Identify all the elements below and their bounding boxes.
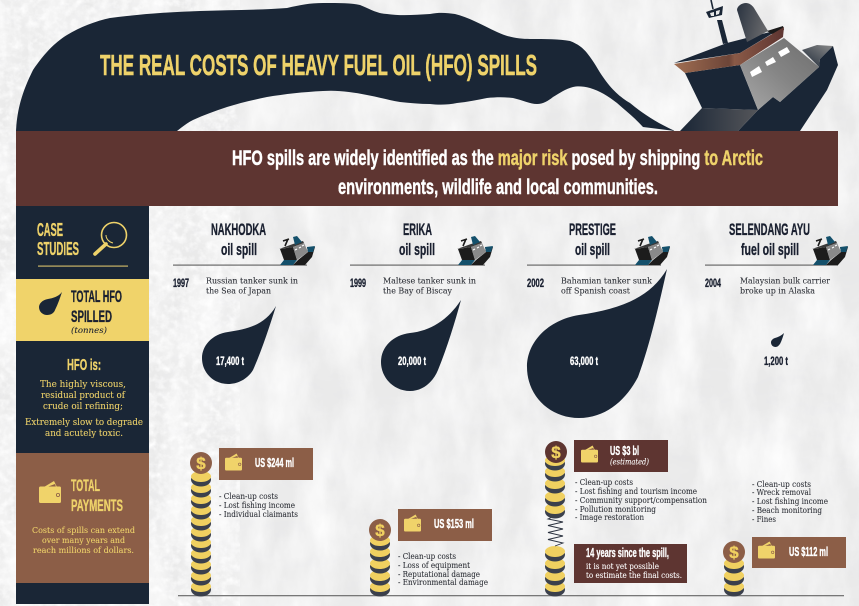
- panel: total payments: TOTAL: [71, 476, 100, 495]
- text: HFO definition: HFO is:: [67, 357, 101, 374]
- payment box: US $112 ml: [752, 537, 846, 568]
- case: Selendang Ayu header: fuel oil spill: [741, 241, 799, 259]
- drop: Nakhodka 17,400 t: 17,400 t: [216, 356, 244, 368]
- list: Erika costs: [398, 551, 488, 587]
- case: Erika header: ERIKA: [403, 221, 432, 239]
- panel: total HFO spilled: SPILLED: [71, 307, 112, 326]
- panel: total HFO spilled: TOTAL HFO: [71, 287, 122, 306]
- case: Nakhodka header: the Sea of Japan: [206, 286, 272, 296]
- case: Prestige header: off Spanish coast: [561, 286, 631, 296]
- case: Erika header: the Bay of Biscay: [383, 286, 452, 296]
- baseline for coin stacks: [178, 595, 844, 596]
- panel: total payments: [16, 453, 149, 583]
- callout: 14 years since the spill: it is not yet possible: [586, 561, 659, 571]
- icon: sinking ship: [674, 0, 838, 131]
- drop: Nakhodka 17,400 t: [202, 306, 276, 384]
- case: Nakhodka header: NAKHODKA: [211, 221, 266, 239]
- payment box: US $3 bl estimated: (estimated): [610, 458, 649, 466]
- case: Erika header: oil spill: [399, 241, 435, 259]
- banner: key message: [16, 131, 838, 206]
- list: Nakhodka costs: [219, 491, 298, 519]
- coin stack: US $112 ml: [723, 541, 745, 596]
- list: Erika costs: - Reputational damage: [398, 569, 480, 579]
- list: Prestige costs: [575, 477, 708, 522]
- banner: key message: HFO spills are widely identified as the major risk posed by shipping to Arctic: [232, 147, 763, 170]
- case: Erika header: [350, 221, 493, 296]
- oil slick band behind title: [16, 3, 675, 131]
- panel: total payments: PAYMENTS: [71, 496, 123, 515]
- banner: key message: environments, wildlife and local communities.: [338, 176, 658, 199]
- coin stack: US $112 ml: $: [729, 543, 739, 562]
- drop: Selendang Ayu 1,200 t: 1,200 t: [764, 356, 788, 368]
- payment box: US $112 ml: US $112 ml: [789, 545, 828, 559]
- callout: 14 years since the spill: to estimate the final costs.: [586, 570, 682, 580]
- icon: magnifying glass: [95, 222, 126, 254]
- list: Prestige costs: - Pollution monitoring: [575, 504, 657, 514]
- list: Nakhodka costs: - Clean-up costs: [219, 491, 278, 501]
- coin stack: US $244 ml: [190, 452, 212, 596]
- case: Erika header: 1999: [350, 276, 366, 290]
- callout: 14 years since the spill: 14 years since the spill,: [586, 546, 669, 560]
- case: Selendang Ayu header: 2004: [705, 276, 721, 290]
- coin stack: US $244 ml: $: [196, 454, 206, 473]
- text: HFO definition: and acutely toxic.: [45, 429, 123, 439]
- drop: Prestige 63,000 t: [527, 269, 667, 418]
- callout: 14 years since the spill: [574, 544, 687, 583]
- list: Erika costs: - Loss of equipment: [398, 560, 471, 570]
- list: Selendang Ayu costs: - Fines: [752, 514, 776, 524]
- list: Erika costs: - Clean-up costs: [398, 551, 456, 561]
- drop: Erika 20,000 t: 20,000 t: [398, 356, 426, 368]
- case: Nakhodka header: [173, 221, 315, 296]
- drop: Erika 20,000 t: [381, 300, 461, 391]
- case: Erika header: Maltese tanker sunk in: [383, 276, 477, 286]
- payment box: US $153 ml: US $153 ml: [434, 517, 474, 531]
- panel: total HFO spilled: [16, 279, 149, 341]
- list: Selendang Ayu costs: - Beach monitoring: [752, 505, 823, 515]
- payment box: US $3 bl estimated: [574, 440, 668, 472]
- case: Selendang Ayu header: Malaysian bulk carrier: [740, 276, 830, 286]
- case: Prestige header: PRESTIGE: [569, 221, 616, 239]
- case: Prestige header: oil spill: [575, 241, 610, 259]
- case: Nakhodka header: oil spill: [221, 241, 257, 259]
- case: Prestige header: Bahamian tanker sunk: [561, 276, 653, 286]
- panel: total HFO spilled: (tonnes): [71, 325, 107, 336]
- payment box: US $3 bl estimated: US $3 bl: [610, 444, 639, 458]
- drop: Selendang Ayu 1,200 t: [764, 333, 788, 368]
- list: Prestige costs: - Clean-up costs: [575, 477, 633, 487]
- payment box: US $244 ml: US $244 ml: [255, 456, 294, 470]
- drop: Prestige 63,000 t: 63,000 t: [570, 356, 598, 368]
- panel: left sidebar: [16, 206, 149, 604]
- title: THE REAL COSTS OF HEAVY FUEL OIL (HFO) SPILLS: [100, 50, 537, 82]
- heading: case studies: CASE: [37, 220, 63, 240]
- case: Selendang Ayu header: [705, 221, 848, 296]
- list: Nakhodka costs: - Individual claimants: [219, 509, 298, 519]
- text: HFO definition: The highly viscous,: [40, 380, 126, 390]
- coin stack: US $153 ml: $: [375, 521, 385, 540]
- case: Prestige header: 2002: [527, 276, 544, 290]
- list: Erika costs: - Environmental damage: [398, 577, 488, 587]
- case: Nakhodka header: Russian tanker sunk in: [206, 276, 299, 286]
- panel: total payments: Costs of spills can extend: [32, 525, 136, 535]
- heading: case studies: STUDIES: [37, 239, 79, 259]
- coin stack: US $3 bl with spring break: $: [551, 443, 561, 462]
- list: Prestige costs: - Lost fishing and tourism income: [575, 486, 697, 496]
- heading: case studies: [37, 220, 79, 259]
- text: HFO definition: residual product of: [41, 391, 126, 401]
- list: Prestige costs: - Image restoration: [575, 512, 645, 522]
- payment box: US $244 ml: [219, 448, 313, 480]
- list: Selendang Ayu costs: - Lost fishing income: [752, 496, 828, 506]
- list: Nakhodka costs: - Lost fishing income: [219, 500, 295, 510]
- text: HFO definition: crude oil refining;: [43, 402, 123, 412]
- payment box: US $153 ml: [398, 509, 492, 541]
- coin stack: US $153 ml: [369, 519, 391, 596]
- list: Prestige costs: - Community support/compensation: [575, 495, 708, 505]
- text: HFO definition: [25, 357, 143, 439]
- list: Selendang Ayu costs: - Clean-up costs: [752, 479, 811, 489]
- panel: total payments: reach millions of dollars.: [33, 545, 134, 555]
- case: Selendang Ayu header: broke up in Alaska: [740, 286, 815, 296]
- list: Selendang Ayu costs: [752, 479, 828, 524]
- case: Nakhodka header: 1997: [173, 276, 189, 290]
- text: HFO definition: Extremely slow to degrade: [25, 418, 143, 428]
- coin stack: US $3 bl with spring break: [545, 441, 567, 596]
- list: Selendang Ayu costs: - Wreck removal: [752, 487, 811, 497]
- panel: total payments: over many years and: [42, 535, 126, 545]
- case: Prestige header: [527, 221, 670, 296]
